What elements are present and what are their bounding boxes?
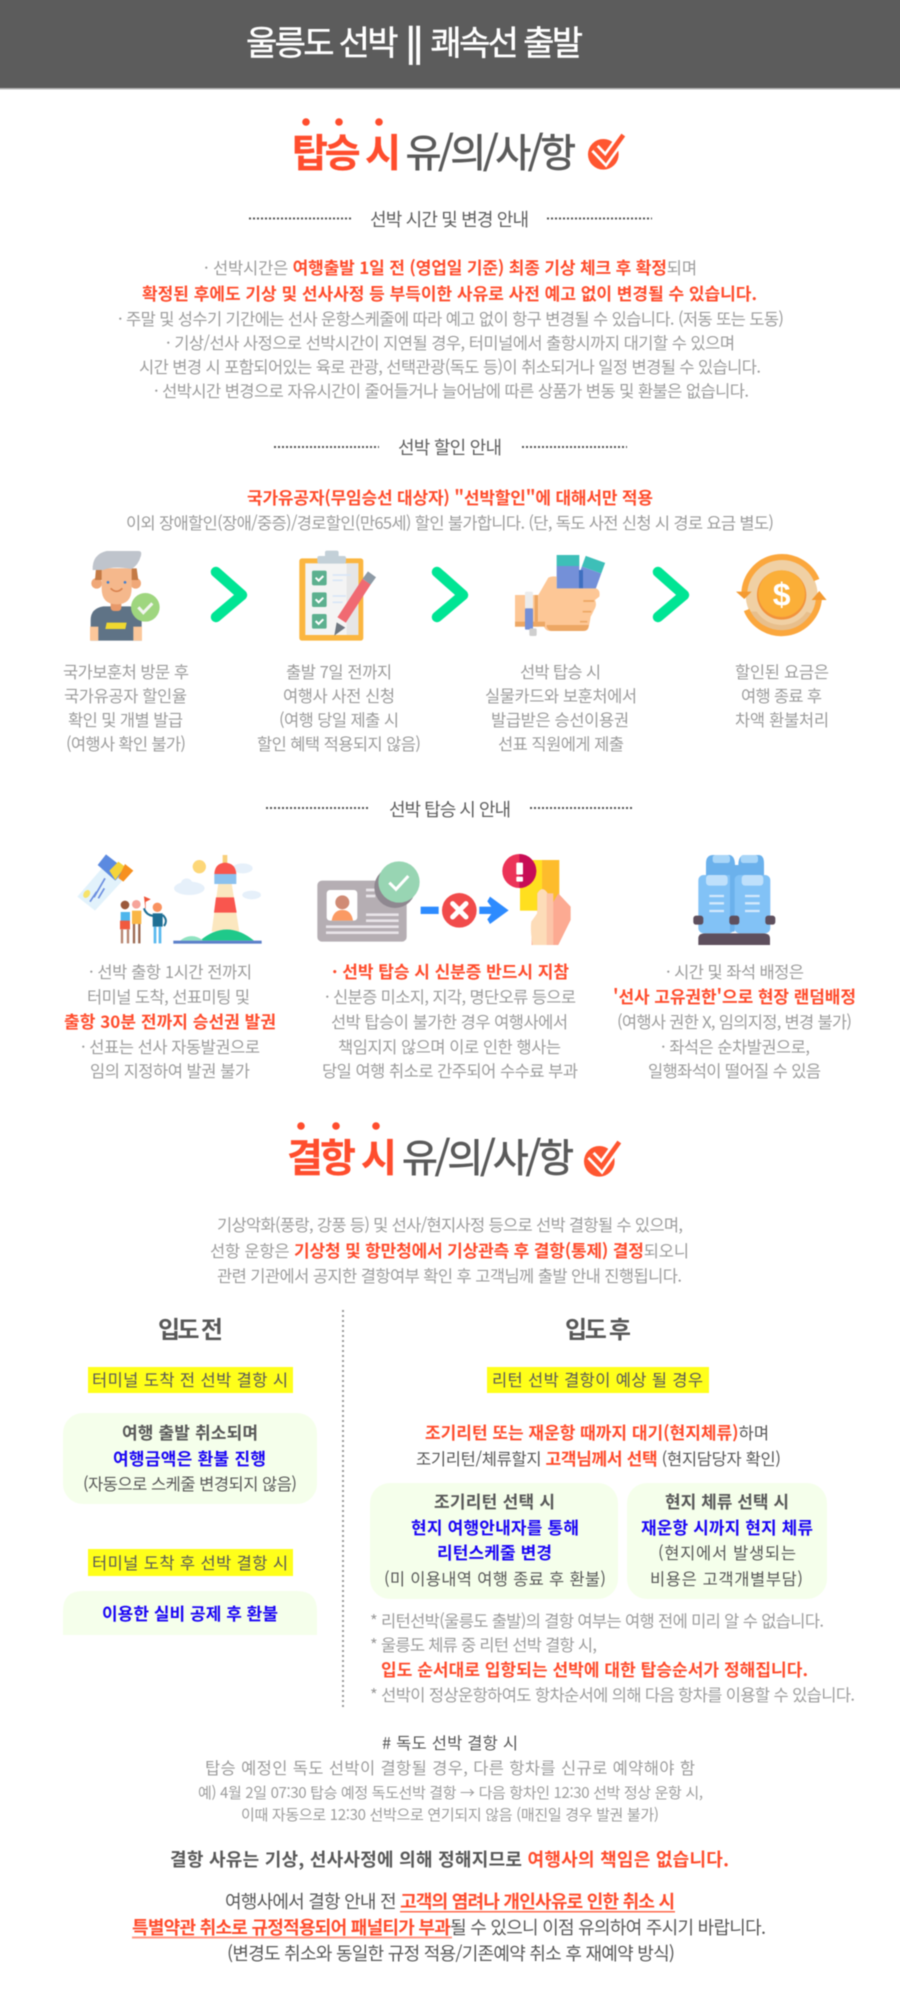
statement: penalty: 특별약관 취소로 규정적용되어 패널티가 부과될 수 있으니 이점 유의하여 주시기 바랍니다.: [132, 1914, 766, 1940]
icon: dollar refund coin: $: [773, 577, 791, 613]
step 1 text: 확인 및 개별 발급: [68, 707, 183, 731]
icon: dollar refund coin: [736, 557, 827, 634]
step 2 text: 할인 혜택 적용되지 않음): [257, 731, 421, 755]
text block: schedule changes: · 주말 및 성수기 기간에는 선사 운항스케줄에 따라 예고 없이 항구 변경될 수 있습니다. (저동 또는 도동): [118, 306, 784, 330]
step 3 text: [485, 659, 637, 755]
text block: discount: [126, 484, 774, 534]
text block: Dokdo cancellation: # 독도 선박 결항 시: [382, 1730, 518, 1754]
column 2 text: [322, 958, 578, 1082]
column 3 text: (여행사 권한 X, 임의지정, 변경 불가): [617, 1009, 852, 1033]
option: stay on island: [627, 1483, 827, 1599]
column 3 text: 일행좌석이 떨어질 수 있음: [648, 1058, 821, 1082]
panel: after entering: [370, 1310, 855, 1706]
panel: before entering: (자동으로 스케줄 변경되지 않음): [83, 1471, 297, 1495]
panel: after entering: 조기리턴/체류할지 고객님께서 선택 (현지담당자 확인): [416, 1445, 781, 1470]
icon: hand holding tickets: [515, 555, 605, 636]
text block: cancellation intro: 기상악화(풍랑, 강풍 등) 및 선사/현지사정 등으로 선박 결항될 수 있으며,: [217, 1212, 683, 1236]
text block: discount: 국가유공자(무임승선 대상자) "선박할인"에 대해서만 적용: [247, 484, 653, 509]
heading: schedule changes: 선박 시간 및 변경 안내: [370, 206, 529, 232]
panel: before entering: 이용한 실비 공제 후 환불: [102, 1600, 278, 1625]
notes: * 선박이 정상운항하여도 항차순서에 의해 다음 항차를 이용할 수 있습니다.: [370, 1682, 855, 1706]
panel: after entering: 입도 후: [565, 1310, 631, 1345]
option: early return: 현지 여행안내자를 통해: [411, 1514, 579, 1539]
panel: after entering: 리턴 선박 결항이 예상 될 경우: [492, 1367, 703, 1391]
text block: cancellation intro: 선항 운항은 기상청 및 항만청에서 기상관측 후 결항(통제) 결정되오니: [210, 1237, 689, 1262]
step 1 text: (여행사 확인 불가): [66, 731, 186, 755]
text block: Dokdo cancellation: [198, 1730, 703, 1825]
text block: schedule changes: 확정된 후에도 기상 및 선사사정 등 부득이한 사유로 사전 예고 없이 변경될 수 있습니다.: [142, 280, 757, 305]
statement: penalty: 여행사에서 결항 안내 전 고객의 염려나 개인사유로 인한 취소 시: [225, 1888, 675, 1914]
option: early return: [370, 1483, 618, 1599]
option: early return: (미 이용내역 여행 종료 후 환불): [384, 1566, 606, 1590]
title: boarding notes: 탑승 시 유/의/사/항: [292, 123, 576, 179]
option: stay on island: 현지 체류 선택 시: [665, 1488, 789, 1513]
step 1 text: 국가유공자 할인율: [64, 683, 187, 707]
icon: checklist clipboard: [299, 551, 372, 641]
step 3 text: 선박 탑승 시: [520, 659, 601, 683]
text block: cancellation intro: [210, 1212, 689, 1287]
option: early return: 조기리턴 선택 시: [434, 1488, 555, 1513]
option: early return: 리턴스케줄 변경: [437, 1539, 552, 1564]
heading: discount: 선박 할인 안내: [398, 434, 502, 460]
text block: Dokdo cancellation: 이때 자동으로 12:30 선박으로 연기되지 않음 (매진일 경우 발권 불가): [241, 1804, 659, 1825]
column 1 text: 임의 지정하여 발권 불가: [90, 1058, 250, 1082]
arrow 3: [658, 572, 684, 617]
column 2 text: 선박 탑승이 불가한 경우 여행사에서: [331, 1009, 568, 1033]
column 1 text: 출항 30분 전까지 승선권 발권: [64, 1008, 276, 1033]
option: stay on island: 재운항 시까지 현지 체류: [641, 1514, 813, 1539]
statement: penalty: [132, 1888, 766, 1966]
step 2 text: [257, 659, 421, 755]
panel: before entering: 입도 전: [158, 1310, 223, 1345]
column 1 text: [64, 959, 276, 1082]
text block: schedule changes: · 선박시간 변경으로 자유시간이 줄어들거나 늘어남에 따른 상품가 변동 및 환불은 없습니다.: [154, 378, 749, 402]
header bar: [0, 0, 900, 90]
panel: before entering: 여행금액은 환불 진행: [113, 1445, 266, 1470]
panel: before entering: 터미널 도착 전 선박 결항 시: [92, 1367, 288, 1391]
text block: schedule changes: 시간 변경 시 포함되어있는 육로 관광, 선택관광(독도 등)이 취소되거나 일정 변경될 수 있습니다.: [139, 354, 761, 378]
statement: penalty: (변경도 취소와 동일한 규정 적용/기존예약 취소 후 재예약 방식): [227, 1940, 675, 1966]
text block: schedule changes: · 기상/선사 사정으로 선박시간이 지연될 경우, 터미널에서 출항시까지 대기할 수 있으며: [166, 330, 735, 354]
step 4 text: 할인된 요금은: [735, 659, 829, 683]
illustration: tickets, travellers and lighthouse: [77, 854, 262, 944]
option: stay on island: 비용은 고객개별부담): [650, 1566, 803, 1590]
step 2 text: 여행사 사전 신청: [283, 683, 395, 707]
step 3 text: 실물카드와 보훈처에서: [485, 683, 637, 707]
icon: veteran person: [90, 551, 160, 641]
step 3 text: 발급받은 승선이용권: [491, 707, 629, 731]
column 3 text: · 시간 및 좌석 배정은: [666, 959, 804, 983]
step 1 text: [63, 659, 189, 755]
panel: before entering: 여행 출발 취소되며: [122, 1419, 258, 1444]
text block: cancellation intro: 관련 기관에서 공지한 결항여부 확인 후 고객님께 출발 안내 진행됩니다.: [217, 1263, 682, 1287]
column 2 text: · 선박 탑승 시 신분증 반드시 지참: [332, 958, 569, 983]
step 2 text: (여행 당일 제출 시: [279, 707, 399, 731]
panel: before entering: 터미널 도착 후 선박 결항 시: [92, 1550, 288, 1574]
notes: 입도 순서대로 입항되는 선박에 대한 탑승순서가 정해집니다.: [381, 1656, 808, 1681]
arrow 1: [216, 572, 242, 617]
dotted divider: [342, 1310, 344, 1710]
column 1 text: · 선박 출항 1시간 전까지: [89, 959, 252, 983]
column 3 text: '선사 고유권한'으로 현장 랜덤배정: [613, 983, 856, 1008]
illustration: seats: [693, 855, 775, 945]
step 4 text: [735, 659, 829, 731]
illustration: ID card required: [317, 854, 571, 945]
step 3 text: 선표 직원에게 제출: [498, 731, 624, 755]
step 2 text: 출발 7일 전까지: [286, 659, 392, 683]
column 3 text: [613, 959, 856, 1082]
notes: * 리턴선박(울릉도 출발)의 결항 여부는 여행 전에 미리 알 수 없습니다.: [370, 1608, 824, 1632]
column 2 text: 당일 여행 취소로 간주되어 수수료 부과: [322, 1058, 578, 1082]
step 4 text: 차액 환불처리: [735, 707, 829, 731]
panel: after entering: 조기리턴 또는 재운항 때까지 대기(현지체류)하며: [425, 1419, 769, 1444]
heading: boarding guide: 선박 탑승 시 안내: [389, 796, 511, 822]
column 1 text: 터미널 도착, 선표미팅 및: [87, 984, 250, 1008]
column 3 text: · 좌석은 순차발권으로,: [661, 1034, 810, 1058]
text block: discount: 이외 장애할인(장애/중증)/경로할인(만65세) 할인 불가합니다. (단, 독도 사전 신청 시 경로 요금 별도): [126, 510, 774, 534]
step 1 text: 국가보훈처 방문 후: [63, 659, 189, 683]
column 2 text: 책임지지 않으며 이로 인한 행사는: [338, 1034, 561, 1058]
arrow 2: [437, 572, 463, 617]
notes: * 울릉도 체류 중 리턴 선박 결항 시,: [370, 1632, 597, 1656]
text block: Dokdo cancellation: 예) 4월 2일 07:30 탑승 예정 독도선박 결항 → 다음 항차인 12:30 선박 정상 운항 시,: [198, 1782, 703, 1803]
text block: Dokdo cancellation: 탑승 예정인 독도 선박이 결항될 경우, 다른 항차를 신규로 예약해야 함: [205, 1755, 695, 1779]
notes: [370, 1608, 855, 1706]
column 1 text: · 선표는 선사 자동발권으로: [81, 1034, 260, 1058]
header bar: 울릉도 선박 || 쾌속선 출발: [246, 16, 583, 65]
step 4 text: 여행 종료 후: [741, 683, 822, 707]
text block: schedule changes: · 선박시간은 여행출발 1일 전 (영업일 기준) 최종 기상 체크 후 확정되며: [204, 254, 697, 279]
statement: responsibility: 결항 사유는 기상, 선사사정에 의해 정해지므로 여행사의 책임은 없습니다.: [170, 1846, 729, 1872]
text block: schedule changes: [118, 254, 784, 402]
option: stay on island: (현지에서 발생되는: [658, 1540, 796, 1564]
panel: before entering: [63, 1310, 317, 1635]
column 2 text: · 신분증 미소지, 지각, 명단오류 등으로: [325, 984, 576, 1008]
title: cancellation notes: 결항 시 유/의/사/항: [287, 1128, 574, 1184]
